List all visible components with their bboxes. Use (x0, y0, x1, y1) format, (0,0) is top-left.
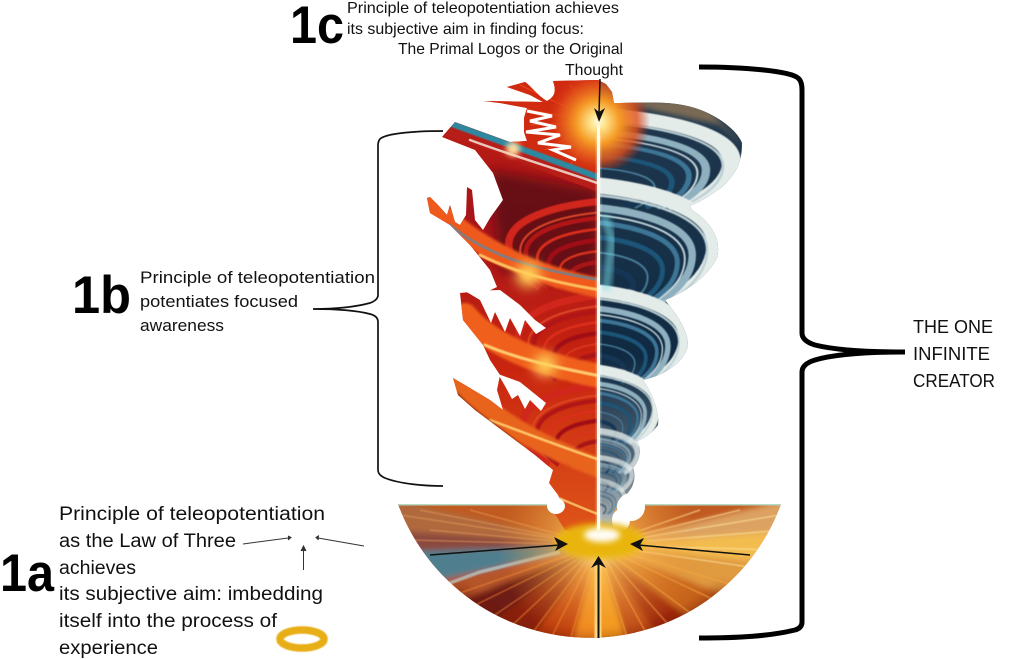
blue lightning beside the axis (604, 215, 612, 290)
heading: 1b: 1b (72, 266, 131, 325)
label: The One Infinite Creator: THE ONE (913, 316, 993, 337)
text block: 1a description: its subjective aim: imbedding (59, 584, 323, 605)
bracket: One Infinite Creator large brace (699, 67, 905, 638)
text block: 1a description: experience (59, 638, 158, 659)
icon: small golden ring (280, 630, 324, 648)
text block: 1c description: its subjective aim in finding focus: (347, 21, 584, 38)
text block: 1a description (59, 504, 325, 659)
text block: 1b description: potentiates focused (140, 292, 298, 311)
arrow: fan left into ring (430, 537, 568, 555)
text block: 1a description: itself into the process of (59, 611, 278, 632)
golden ring at the vortex foot (555, 523, 645, 559)
vortex right half: blue and white spiral (598, 78, 748, 543)
small arrows: key beside 1a (243, 536, 364, 570)
vortex left half: red and orange spiral (420, 78, 600, 543)
text block: 1a description: achieves (59, 558, 136, 579)
text block: 1a description: Principle of teleopotentiation (59, 504, 325, 525)
label: The One Infinite Creator: INFINITE (913, 343, 990, 364)
text block: 1a description: as the Law of Three (59, 531, 236, 552)
text block: 1b description: Principle of teleopotentiation (140, 268, 375, 287)
arrow: fan bottom into ring (591, 556, 606, 638)
fan dark rim (450, 595, 730, 651)
fan: glowing base of the vortex (398, 504, 781, 638)
text block: 1c description: Thought (565, 62, 624, 79)
arrow: from top text to primal logos (594, 79, 605, 122)
heading: 1a: 1a (0, 544, 54, 603)
fan rays (400, 510, 785, 640)
text block: 1c description (347, 0, 624, 79)
text block: 1c description: Principle of teleopotentiation achieves (347, 0, 619, 17)
text block: 1b description (140, 268, 375, 335)
white tears in the red spiral (465, 111, 645, 531)
text block: 1c description: The Primal Logos or the Original (398, 41, 623, 58)
label: The One Infinite Creator (913, 316, 995, 391)
text block: 1b description: awareness (140, 316, 224, 335)
teal and white band (428, 124, 600, 515)
bracket: 1b thin brace (313, 131, 443, 486)
label: The One Infinite Creator: CREATOR (913, 370, 995, 391)
sun glow, right side (599, 80, 650, 168)
central axis of light (596, 125, 601, 530)
arrow: fan right into ring (630, 538, 750, 555)
